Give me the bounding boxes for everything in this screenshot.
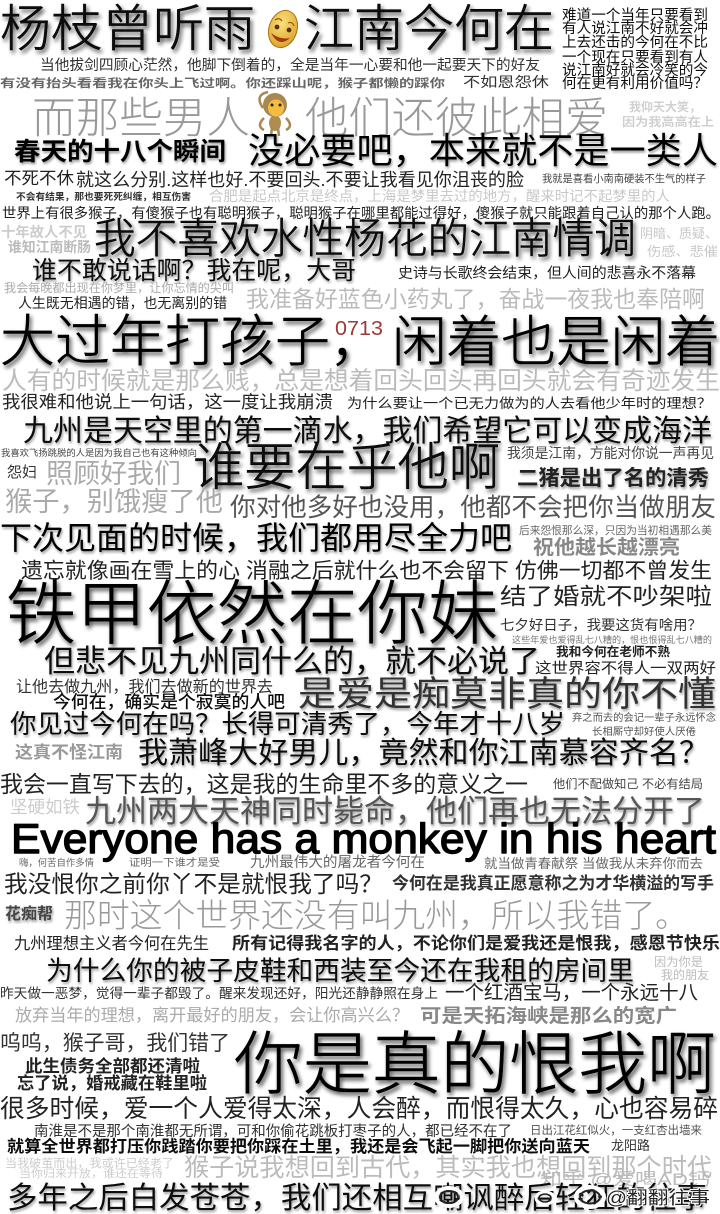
quote line: 坚硬如铁 (10, 797, 80, 817)
quote line: 这世界容不得人一双两好 (535, 660, 716, 677)
quote line: 龙阳路 (611, 1138, 650, 1153)
pale note (622, 99, 714, 129)
quote line: 弃之而去的会记一辈子永远怀念 (572, 711, 716, 724)
text block: top right paragraph: 何在更有利用价值吗？ (562, 75, 708, 92)
heading: jiangnan: 江南今何在 (304, 1, 554, 57)
quote line: 我准备好蓝色小药丸了，奋战一夜我也奉陪啊 (246, 286, 705, 312)
large heading: 闲着也是闲着 (392, 311, 720, 373)
quote line: 有没有抬头看看我在你头上飞过啊。你还踩山呢，猴子都懒的踩你 (0, 76, 446, 90)
quote line: 证明一下谁才是受 (129, 856, 220, 869)
quote line: 猴子，别饿瘦了他 (5, 487, 223, 517)
quote heading: 我不喜欢水性杨花的江南情调 (94, 215, 636, 262)
quote line: 很多时候，爱一个人爱得太深，人会醉，而恨得太久，心也容易碎 (0, 1095, 718, 1123)
text block: top right paragraph: 上去还击的今何在不比 (562, 34, 708, 51)
text block: top right paragraph: 一个现在只要看到有人 (562, 49, 708, 66)
text block: top right paragraph: 难道一个当年只要看到 (562, 7, 708, 24)
quote line: 照顾好我们 (46, 459, 181, 489)
quote line: 我很难和他说上一句话，这一度让我崩溃 (2, 392, 333, 412)
quote line: 人有的时候就是那么贱，总是想着回头回头再回头就会有奇迹发生 (2, 367, 720, 395)
text block: top right paragraph: 说江南好就会冷笑的今 (562, 62, 708, 79)
quote line: 为什么要让一个已无力做为的人去看他少年时的理想？ (347, 396, 712, 411)
icon: potato face (264, 7, 302, 51)
quote line: 你对他多好也没用，他都不会把你当做朋友 (230, 494, 716, 522)
quote line: 不死不休 (4, 169, 74, 188)
quote heading: 是爱是痴莫非真的你不懂 (298, 675, 716, 714)
bold subtitle: 春天的十八个瞬间 (14, 138, 226, 166)
number label: 0713 (335, 318, 383, 340)
quote line: 今何在是我真正愿意称之为才华横溢的写手 (392, 873, 714, 893)
pale note: 我仰天大笑， (629, 99, 701, 114)
quote line: 就算全世界都打压你践踏你要把你踩在土里，我还是会飞起一脚把你送向蓝天 (7, 1136, 590, 1156)
heading: grey men: 而那些男人 (32, 95, 250, 143)
quote line: 一个红酒宝马，一个永远十八 (445, 982, 698, 1004)
quote line: 合肥是起点北京是终点，上海是梦里去过的地方，醒来时记不起梦里的人 (209, 188, 670, 204)
quote line: 长相厮守却好使人厌倦 (592, 725, 696, 738)
quote line: 花痴帮 (5, 904, 53, 923)
quote line: 为什么你的被子皮鞋和西装至今还在我租的房间里 (46, 956, 634, 986)
text block: top right paragraph: 有人说江南不好就会冲 (562, 20, 708, 37)
quote line: 我的朋友 (661, 967, 709, 982)
quote line: 谁不敢说话啊？我在呢，大哥 (32, 257, 356, 285)
large heading: 你是真的恨我啊 (234, 1026, 716, 1103)
quote line: 今何在，确实是个寂寞的人吧 (53, 692, 285, 712)
watermark: zhihu: 知乎 @爱喝AD钙 (540, 1170, 710, 1189)
quote line: 因为你是 (654, 955, 703, 969)
quote line: 史诗与长歌终会结束，但人间的悲喜永不落幕 (398, 265, 697, 282)
largest heading: 铁甲依然在你妹 (6, 575, 498, 653)
quote line: 我没恨你之前你丫不是就恨我了吗？ (4, 871, 383, 897)
quote line: 我会每晚都出现在你梦里，让你忘情的尖叫 (4, 280, 234, 295)
quote line: 祝他越长越漂亮 (533, 535, 680, 559)
quote line: 嗨，何苦自作多情 (19, 857, 94, 868)
quote line: 后来怨恨那么深，只因为当初相遇那么美 (519, 524, 712, 537)
quote line: 多年之后白发苍苍，我们还相互嘲讽醉后轻狂的往事 (7, 1181, 707, 1214)
quote line: 九州理想主义者今何在先生 (14, 935, 209, 953)
quote line: 十年故人不见 (1, 224, 87, 240)
quote line: 南淮是不是那个南淮都无所谓，可和你偷花跳板打枣子的人，都已经不在了 (34, 1122, 512, 1140)
quote line: 人生既无相遇的错，也无离别的错 (18, 295, 227, 311)
quote line: 没必要吧，本来就不是一类人 (248, 130, 718, 171)
heading: yangzhi: 杨枝曾听雨 (0, 1, 255, 57)
quote line: 让他去做九州，我们去做新的世界去 (16, 678, 273, 696)
quote line: 九州是天空里的第一滴水，我们希望它可以变成海洋 (23, 415, 712, 448)
quote line: 可是天拓海峡是那么的宽广 (420, 1004, 677, 1027)
watermark: weibo logos (436, 1187, 604, 1207)
quote line: 你见过今何在吗？长得可清秀了，今年才十八岁 (10, 709, 565, 739)
quote line: 他们不配做知己 不必有结局 (553, 776, 703, 791)
large heading: 谁要在乎他啊 (193, 439, 500, 496)
quote line: 谁知江南断肠 (8, 239, 91, 255)
quote line: 忘了说，婚戒藏在鞋里啦 (17, 1073, 207, 1093)
quote line: 我须是江南，方能对你说一声再见 (507, 445, 714, 461)
quote line: 结了婚就不吵架啦 (500, 583, 712, 609)
quote line: 我和今何在老师不熟 (556, 644, 670, 659)
quote line: 阴暗、质疑、 (640, 226, 718, 241)
quote line: 伤感、悲催 (647, 244, 718, 259)
large heading: 大过年打孩子， (0, 310, 385, 373)
quote heading: 那时这个世界还没有叫九州，所以我错了。 (64, 897, 688, 934)
quote line: 当你归来开放，谁还在等待 (19, 1166, 163, 1180)
quote line: 我喜欢飞扬跳脱的人是因为我自己也有这种倾向 (1, 447, 197, 458)
quote line: 昨天做一恶梦，觉得一辈子都毁了。醒来发现还好，阳光还静静照在身上 (0, 985, 438, 1001)
quote line: 呜呜，猴子哥，我们错了 (0, 1032, 230, 1055)
quote line: 七夕好日子，我要这货有啥用？ (500, 617, 702, 634)
quote line: 我就是喜看小南南硬装不生气的样子 (542, 172, 706, 185)
quote line: 这真不怪江南 (15, 742, 123, 762)
quote line: 我萧峰大好男儿，竟然和你江南慕容齐名？ (138, 737, 709, 770)
quote line: 九州最伟大的屠龙者今何在 (250, 854, 425, 871)
quote line: 此生债务全部都还清啦 (25, 1056, 200, 1076)
quote line: 世界上有很多猴子，有傻猴子也有聪明猴子，聪明猴子在哪里都能过得好，傻猴子就只能跟着自己认的那个人跑。 (2, 205, 720, 222)
quote line: 我会一直写下去的，这是我的生命里不多的意义之一 (0, 771, 528, 797)
heading: grey love: 他们还彼此相爱 (305, 95, 608, 143)
quote line: 这些年爱也爱得乱七八糟的，恨也恨得乱七八糟的 (512, 634, 712, 645)
pale note: 因为我高高在上 (622, 114, 714, 129)
quote line: 但悲不见九州同什么的，就不必说了 (44, 644, 540, 679)
quote line: 放弃当年的理想，离开最好的朋友，会让你高兴么？ (15, 1006, 409, 1025)
quote line: 不会有结果，那也要死死纠缠，相互伤害 (16, 191, 191, 203)
quote line: 就这么分别.这样也好.不要回头.不要让我看见你沮丧的脸 (76, 170, 524, 190)
icon: monkey (259, 92, 290, 136)
quote line: 怨妇 (7, 464, 37, 481)
quote line: 二猪是出了名的清秀 (517, 467, 709, 490)
quote line: 日出江花红似火，一支红杏出墙来 (530, 1123, 702, 1137)
quote line: 九州两大天神同时毙命，他们再也无法分开了 (85, 794, 705, 829)
handwritten heading: Everyone has a monkey in his heart (11, 815, 716, 862)
watermark: weibo handle: @翻翻往事 (606, 1188, 710, 1208)
quote line: 所有记得我名字的人，不论你们是爱我还是恨我，感恩节快乐 (232, 933, 720, 953)
quote line: 当我破茧而出，我或许已经老了 (5, 1156, 174, 1170)
quote line: 不如恩怨休 (463, 74, 549, 90)
quote line: 就当做青春献祭 当做我从未弃你而去 (484, 856, 703, 871)
quote line: 遗忘就像画在雪上的心 消融之后就什么也不会留下 仿佛一切都不曾发生 (21, 559, 712, 583)
text block: top right paragraph (562, 7, 708, 92)
quote line: 下次见面的时候，我们都用尽全力吧 (0, 520, 512, 556)
quote line: 猴子说我想回到古代，其实我也想回到那个时代 (184, 1154, 712, 1182)
quote line: 当他拔剑四顾心茫然，他脚下倒着的，全是当年一心要和他一起要天下的好友 (40, 56, 540, 74)
